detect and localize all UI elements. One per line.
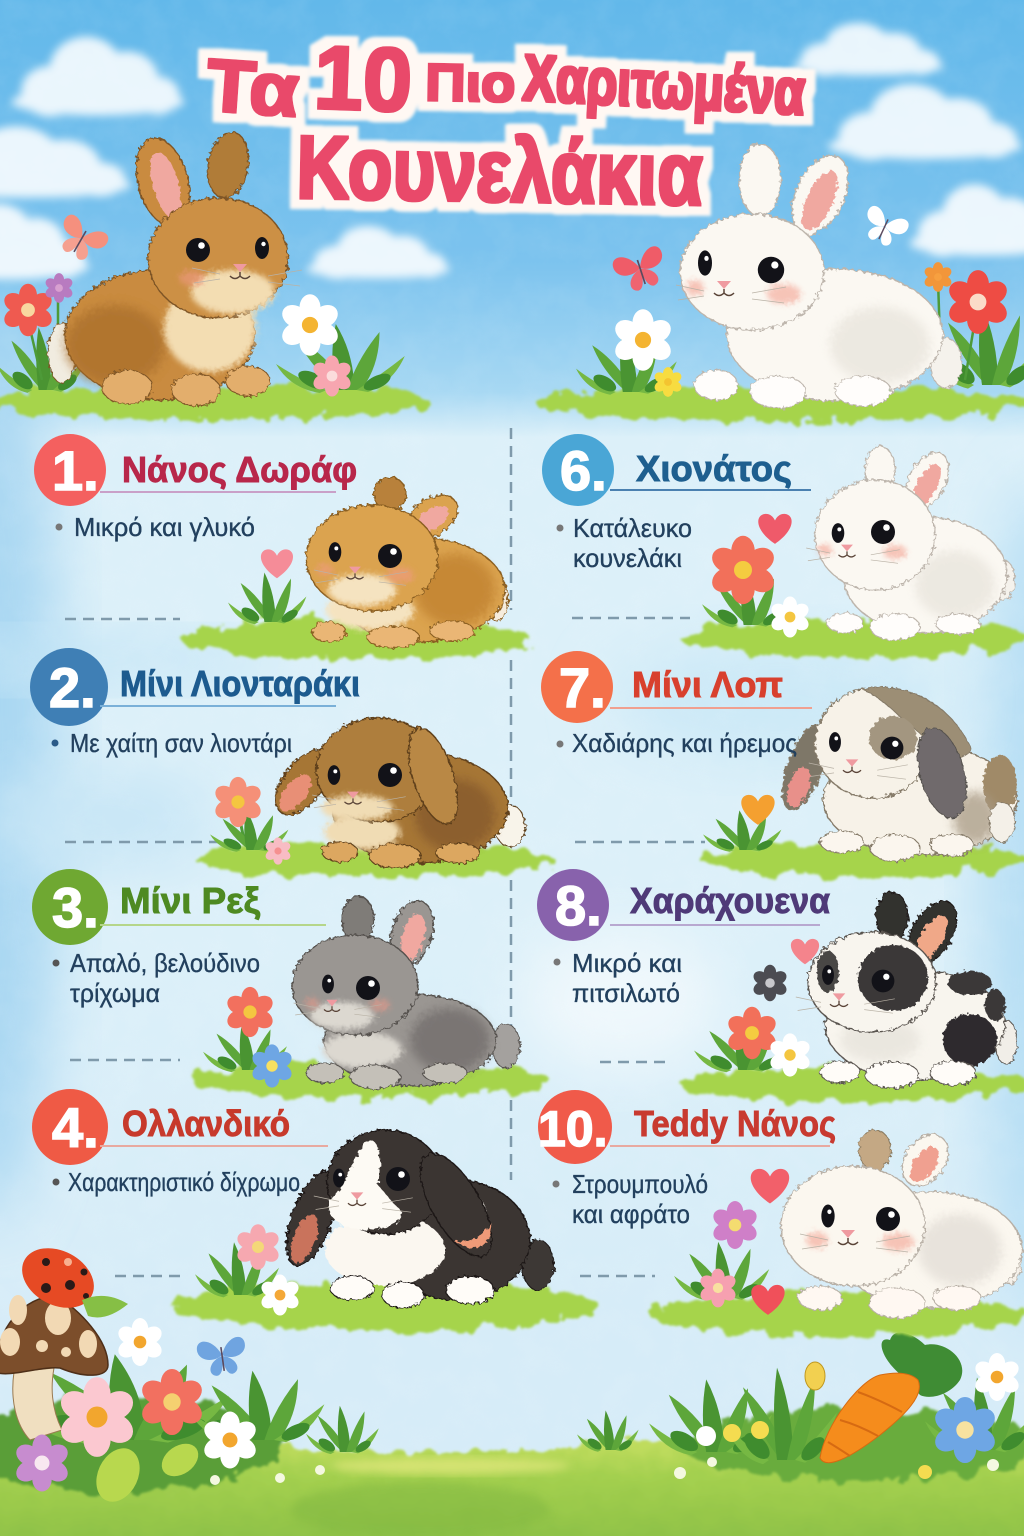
badge xyxy=(30,648,108,726)
flowers xyxy=(203,987,294,1088)
ground xyxy=(170,1282,600,1330)
bunny xyxy=(676,144,962,408)
panel: 2 Μίνι Λιονταράκι xyxy=(30,648,555,877)
heading: Χιονάτος xyxy=(636,448,792,489)
ground xyxy=(700,843,1024,877)
panel: 10 Teddy Νάνος xyxy=(538,1090,1024,1337)
title: Τα xyxy=(204,43,301,132)
butterfly red xyxy=(611,244,671,296)
clouds xyxy=(0,23,1024,280)
panel: top-left brown bunny xyxy=(0,129,430,420)
badge: 1. xyxy=(52,439,99,502)
panel: 6 Χιονάτος xyxy=(542,434,1024,658)
bullet text xyxy=(52,948,260,1008)
badge: 8. xyxy=(555,874,602,937)
title: Κουνελάκια xyxy=(296,118,703,225)
bullet text: Στρουμπουλό xyxy=(572,1169,708,1199)
bullet text: και αφράτο xyxy=(572,1199,690,1229)
badge: 2. xyxy=(49,656,96,719)
bottom-right flowers xyxy=(696,1353,1022,1463)
divider xyxy=(70,1059,180,1061)
ground xyxy=(190,1062,550,1098)
bunny xyxy=(48,129,302,406)
heading: Μίνι Λοπ xyxy=(632,664,783,705)
ground xyxy=(535,385,1024,421)
badge xyxy=(542,434,614,506)
badge xyxy=(32,869,108,945)
flowers and grass xyxy=(0,273,405,397)
bunny xyxy=(306,477,508,648)
panel: 1 Νάνος Δωράφ xyxy=(34,434,530,659)
ground xyxy=(195,843,555,877)
carrot xyxy=(820,1332,962,1463)
title: Πιο xyxy=(425,54,516,114)
flowers xyxy=(674,1169,789,1315)
panel: 7 Μίνι Λοπ xyxy=(541,651,1024,877)
divider xyxy=(600,1061,665,1063)
bullet text: Μικρό και γλυκό xyxy=(74,512,255,542)
butterfly xyxy=(51,212,111,267)
ground xyxy=(650,1293,1024,1337)
badge xyxy=(32,1089,108,1165)
heading: Teddy Νάνος xyxy=(634,1103,836,1144)
bullet text: Απαλό, βελούδινο xyxy=(70,948,260,978)
heading: Χαράχουενα xyxy=(630,880,830,921)
badge: 7. xyxy=(559,656,606,719)
panel: 3 Μίνι Ρεξ xyxy=(32,869,550,1098)
panel: top-right white bunny xyxy=(535,144,1024,421)
butterfly blue xyxy=(196,1336,249,1378)
heading: Μίνι Λιονταράκι xyxy=(120,663,360,704)
bunny xyxy=(796,892,1017,1088)
heading: Μίνι Ρεξ xyxy=(120,880,261,921)
badge: 10. xyxy=(538,1101,608,1157)
ground xyxy=(0,384,430,420)
ground xyxy=(680,1066,1024,1102)
bunny xyxy=(276,1130,554,1308)
flowers xyxy=(195,1224,301,1316)
bunny xyxy=(292,896,520,1089)
plant and heart xyxy=(703,795,781,852)
divider xyxy=(580,1275,655,1277)
bunny xyxy=(265,718,525,868)
ground xyxy=(680,618,1024,658)
badge xyxy=(537,869,609,941)
bunny xyxy=(806,445,1015,640)
badge: 4. xyxy=(52,1096,99,1159)
panel: 8 Χαράχουενα xyxy=(537,869,1024,1102)
badge xyxy=(541,651,613,723)
title: Χαριτωμένα xyxy=(521,40,807,129)
bullet text: Χαδιάρης και ήρεμος xyxy=(572,728,797,758)
flowers xyxy=(694,939,819,1077)
flowers xyxy=(210,777,292,865)
bullet text: Μικρό και xyxy=(572,948,682,978)
bunny xyxy=(781,1126,1022,1318)
bullet text: πιτσιλωτό xyxy=(572,978,680,1008)
bullet text xyxy=(554,948,682,1008)
bullet text: κουνελάκι xyxy=(573,543,682,573)
divider xyxy=(65,618,180,620)
flowers and grass xyxy=(576,262,1024,397)
heading: Ολλανδικό xyxy=(122,1103,290,1144)
divider xyxy=(572,617,690,619)
bullet text: Κατάλευκο xyxy=(573,513,692,543)
divider xyxy=(65,841,230,843)
bullet text xyxy=(552,1169,708,1229)
badge xyxy=(34,434,106,506)
ground xyxy=(180,617,530,659)
mushroom with ladybug xyxy=(0,1236,128,1440)
flowers xyxy=(702,514,811,638)
plant and heart xyxy=(228,549,306,625)
divider xyxy=(115,1275,180,1277)
bunny xyxy=(774,687,1017,861)
bullet text: τρίχωμα xyxy=(70,978,160,1008)
panel: 4 Ολλανδικό xyxy=(32,1089,600,1330)
column divider xyxy=(510,428,512,1180)
bullet text: Με χαίτη σαν λιοντάρι xyxy=(70,728,292,758)
heading: Νάνος Δωράφ xyxy=(122,449,357,490)
title: 10 xyxy=(312,28,414,131)
bottom meadow xyxy=(0,1354,1024,1536)
bullet text: Χαρακτηριστικό δίχρωμο xyxy=(68,1167,300,1197)
divider xyxy=(575,841,705,843)
title xyxy=(204,28,807,225)
butterfly white xyxy=(858,204,911,252)
bullet text xyxy=(556,513,692,573)
bottom-left flowers xyxy=(12,1318,260,1509)
badge: 6. xyxy=(560,439,607,502)
badge: 3. xyxy=(52,876,99,939)
